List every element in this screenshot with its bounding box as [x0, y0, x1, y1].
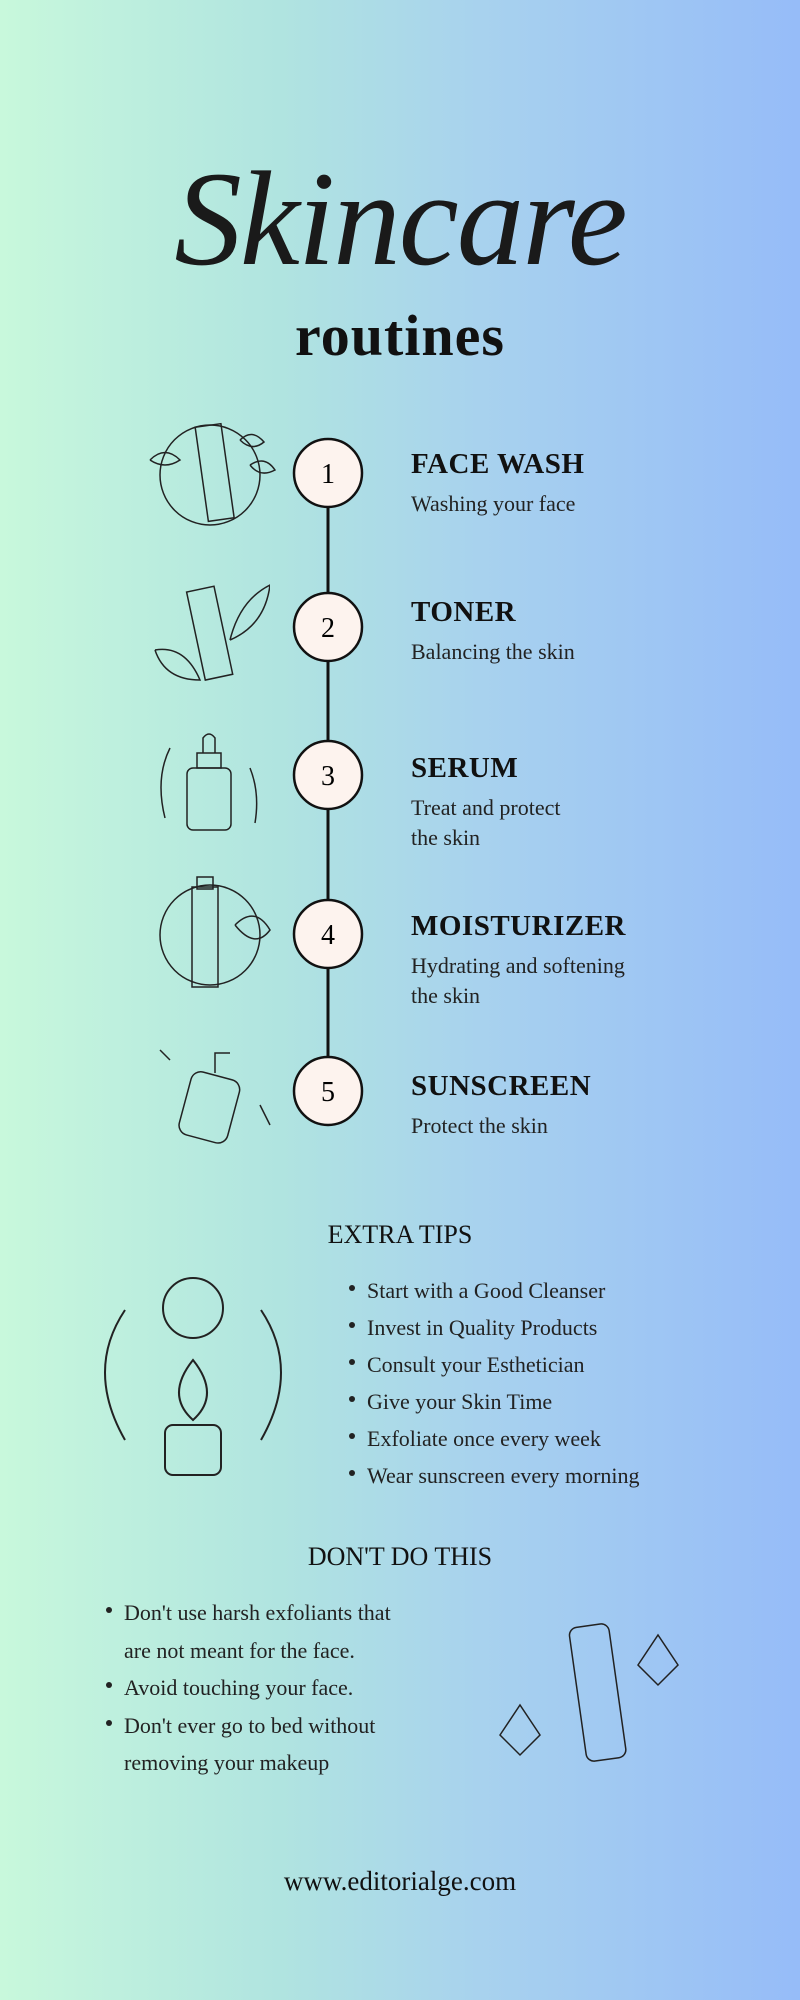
step 2 text: Balancing the skin — [411, 639, 575, 664]
step 3 text: SERUM — [411, 752, 518, 784]
step 5 text: Protect the skin — [411, 1113, 548, 1138]
step 4 icon — [159, 876, 271, 988]
don't list: Avoid touching your face. — [124, 1675, 353, 1700]
timeline: 4 — [321, 920, 335, 951]
step 2 icon — [154, 584, 270, 681]
title: Skincare: Skincare — [174, 145, 626, 294]
don't do this heading: DON'T DO THIS — [308, 1542, 492, 1571]
don't list: are not meant for the face. — [124, 1638, 355, 1662]
step 5 text: SUNSCREEN — [411, 1070, 591, 1102]
step 5 text — [411, 1070, 591, 1138]
step 4 text: MOISTURIZER — [411, 910, 626, 942]
step 3 text: the skin — [411, 825, 480, 850]
footer url: www.editorialge.com — [284, 1866, 516, 1896]
extra tips list: Consult your Esthetician — [367, 1352, 585, 1377]
extra tips list: Start with a Good Cleanser — [367, 1278, 605, 1303]
timeline: 5 — [321, 1077, 335, 1108]
timeline: 2 — [321, 613, 335, 644]
step 2 text: TONER — [411, 596, 516, 628]
extra tips list: Wear sunscreen every morning — [367, 1463, 640, 1488]
timeline: 3 — [321, 761, 335, 792]
step 3 text — [411, 752, 560, 850]
step 5 icon — [160, 1050, 271, 1144]
step 1 text: FACE WASH — [411, 448, 584, 480]
extra tips list — [349, 1278, 640, 1488]
step 3 text: Treat and protect — [411, 795, 560, 820]
step 3 icon — [160, 733, 258, 831]
extra tips list: Give your Skin Time — [367, 1389, 552, 1414]
don't list: Don't use harsh exfoliants that — [124, 1600, 391, 1625]
step 4 text: the skin — [411, 983, 480, 1008]
extra tips icon — [104, 1277, 282, 1476]
timeline — [292, 438, 364, 1126]
extra tips list: Invest in Quality Products — [367, 1315, 597, 1340]
don't list: Don't ever go to bed without — [124, 1712, 375, 1738]
step 4 text: Hydrating and softening — [411, 953, 625, 978]
don't icon — [499, 1623, 679, 1762]
step 4 text — [411, 910, 626, 1008]
timeline: 1 — [321, 459, 335, 490]
step 1 icon — [150, 422, 276, 526]
step 2 text — [411, 596, 575, 664]
don't list: removing your makeup — [124, 1750, 329, 1775]
extra tips heading: EXTRA TIPS — [328, 1220, 472, 1249]
don't list — [106, 1600, 391, 1775]
step 1 text — [411, 448, 584, 516]
step 1 text: Washing your face — [411, 491, 575, 516]
subtitle: routines: routines — [295, 303, 505, 368]
extra tips list: Exfoliate once every week — [367, 1426, 601, 1451]
